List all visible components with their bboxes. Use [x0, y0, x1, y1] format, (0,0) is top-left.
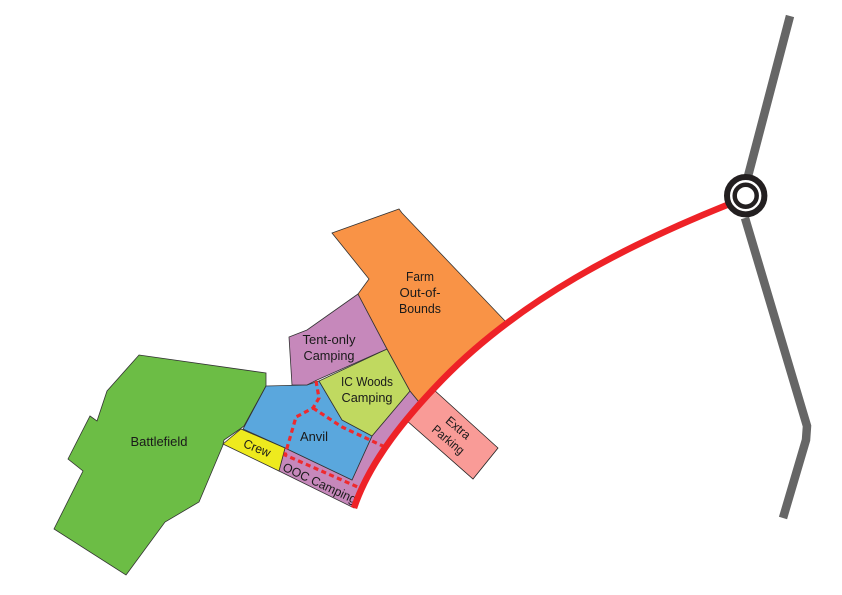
icon: roundabout: [727, 177, 764, 214]
panel: crew: Crew: [241, 437, 273, 460]
route: dashed red paths: [285, 381, 385, 488]
panel: IC woods camping: Camping: [342, 391, 393, 405]
panel: battlefield: [54, 355, 266, 575]
panel: extra parking: [406, 389, 498, 479]
panel: battlefield: Battlefield: [130, 435, 188, 449]
panel: OOC camping: OOC Camping: [280, 460, 359, 507]
panel: extra parking: Extra: [443, 414, 473, 442]
road: grey main road: [745, 16, 807, 518]
panel: farm out-of-bounds: Farm: [406, 270, 434, 284]
panel: IC woods camping: IC Woods: [341, 375, 393, 389]
panel: farm out-of-bounds: Out-of-: [400, 286, 440, 300]
panel: OOC camping: [279, 391, 419, 508]
panel: anvil: [243, 381, 372, 480]
panel: farm out-of-bounds: [332, 209, 507, 402]
panel: tent-only camping: [289, 294, 387, 385]
road: red access road: [354, 205, 727, 508]
panel: farm out-of-bounds: Bounds: [399, 302, 441, 316]
panel: IC woods camping: [319, 349, 410, 436]
panel: tent-only camping: Tent-only: [302, 333, 356, 347]
panel: crew: [223, 429, 285, 471]
panel: extra parking: Parking: [429, 422, 467, 458]
panel: anvil: Anvil: [300, 430, 328, 444]
panel: tent-only camping: Camping: [304, 349, 355, 363]
